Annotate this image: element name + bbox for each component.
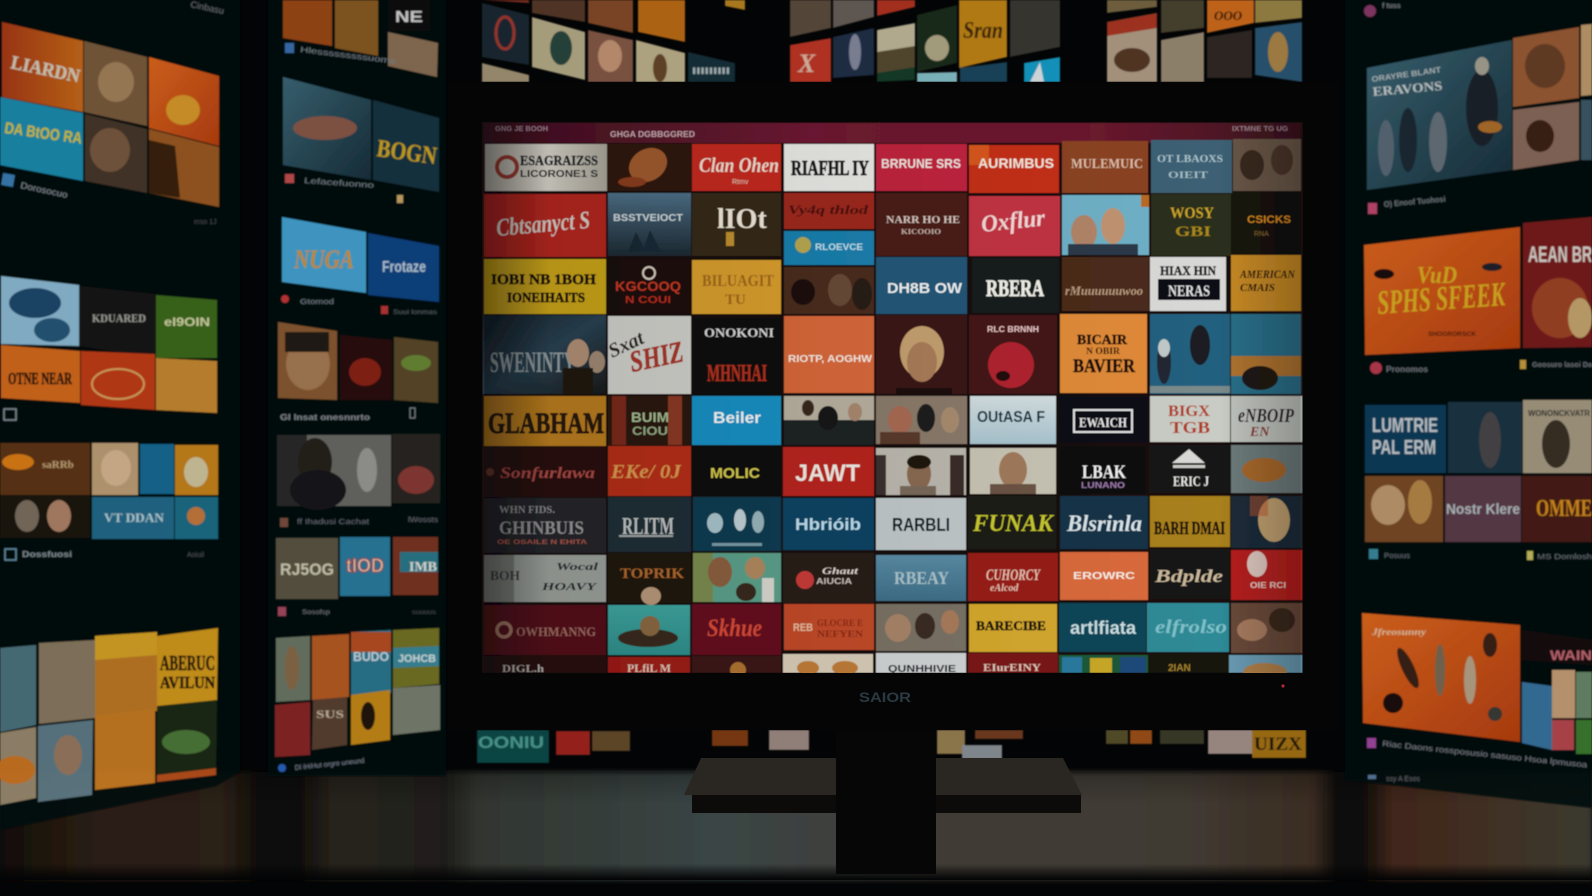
tile: pale caps <box>876 498 966 550</box>
screen top bar: GNG JE BOOH <box>495 126 548 133</box>
screen Q: mixed posters: PAL ERM <box>1372 437 1436 459</box>
tile: red cut 2 <box>968 653 1058 674</box>
reflection strip left: OONIU <box>478 733 544 752</box>
tile: pale caps: RARBLI <box>892 515 950 535</box>
tile: red script: Clan Ohen <box>699 153 779 177</box>
tile: rust <box>1062 141 1148 193</box>
tile: amber lettering: CMAIS <box>1240 282 1275 294</box>
tile: red planet: RLC BRNNH <box>987 325 1039 334</box>
tile: dark grey gothic <box>484 498 606 553</box>
tile: red handwriting: Vy4q thlod <box>788 202 869 217</box>
tile: blue emblem: RLOEVCE <box>815 242 863 252</box>
tile: blue faded <box>876 555 966 601</box>
tile: black stacked <box>1060 446 1146 494</box>
tile: dark red text: N COUI <box>625 295 671 306</box>
tile: pale with red <box>1150 396 1230 442</box>
tile: pale emblem title: ESAGRAIZSS <box>520 154 598 169</box>
screen A: top-left posters: mso 1J <box>194 219 217 226</box>
tile: dark teal bold: artlfiata <box>1070 618 1137 638</box>
screen F: teal posters: BOGN <box>375 135 438 170</box>
tile: white bold <box>784 144 874 191</box>
stand base front <box>692 795 1081 813</box>
screen R: bottom-right posters: Jfreosunny <box>1371 627 1427 637</box>
tile: pale dark script: EN <box>1249 425 1270 440</box>
row 9 tiles <box>484 603 1302 655</box>
tile: blue dancers <box>1150 314 1230 394</box>
tile: coral wide: EROWRC <box>1073 571 1135 582</box>
tile: blue emblem <box>784 231 874 265</box>
panel: second wall column <box>268 0 446 776</box>
tile: amber lettering: AMERICAN <box>1239 267 1296 281</box>
tile: red script: Rtmv <box>732 179 749 186</box>
row 6 tiles <box>484 445 1302 497</box>
tile: red script 2 <box>484 194 606 257</box>
tile: dark grey gothic: OE OSAILE N EHITA <box>497 539 587 546</box>
tile: colourful cut <box>1059 655 1148 673</box>
tile: red emblem: OIE RCI <box>1250 581 1286 590</box>
screen R: bottom-right posters: ssy A Esos <box>1386 776 1420 783</box>
screen A: top-left posters <box>0 0 225 226</box>
tile: smiling portrait <box>970 448 1056 494</box>
tile: black boxed title <box>1059 396 1148 443</box>
tile: red script 4: eAlcod <box>990 583 1019 594</box>
tile: black stacked: LUNANO <box>1081 481 1125 490</box>
screen R: bottom-right posters <box>1362 613 1592 783</box>
tile: light portrait <box>876 448 966 495</box>
tile: yellow bold <box>484 259 606 314</box>
tile: blue bold: DH8B OW <box>887 280 963 297</box>
tile: dark teal poster: SWENINTY <box>490 346 575 379</box>
screen K: bottom posters: JOHCB <box>398 653 436 665</box>
tile: dark maroon script <box>484 447 606 497</box>
tile: black orange: CSICKS <box>1247 214 1291 226</box>
tile: black two lines: ONOKONI <box>704 325 774 340</box>
tile: black yellow jagged: FUNAK <box>972 511 1055 537</box>
tile: white and black: NERAS <box>1168 283 1210 300</box>
screen N: top centre-right posters <box>1107 0 1302 82</box>
tile: slate: OT LBAOXS <box>1157 154 1223 165</box>
screen K: bottom posters <box>275 628 440 772</box>
tile: two portraits <box>1062 195 1149 255</box>
screen P: orange poster: VuD <box>1417 263 1457 289</box>
tile: red white <box>783 447 874 496</box>
screen I: photo posters: ff Ihadusi Cachat <box>297 519 369 526</box>
tile: orange poster: N OBIR <box>1086 346 1121 356</box>
screen E: top posters: Hlesssssssssuoms <box>300 45 396 66</box>
screen O: top-right posters: ORAYRE BLANT <box>1371 65 1442 84</box>
tile: yellow black: BARECIBE <box>976 618 1046 633</box>
screen J: three posters: suuuus <box>412 610 436 616</box>
screen Q: mixed posters: Posuus <box>1384 553 1411 560</box>
tile: pale caps cut <box>876 653 966 675</box>
reflection strip right <box>937 730 1306 759</box>
tile: brown scrawl <box>1062 257 1149 311</box>
monitor bezel <box>448 82 1337 730</box>
tile: pale blue title <box>970 396 1056 444</box>
tile: family photo <box>693 553 781 602</box>
screen G: blue posters: NUGA <box>293 245 354 274</box>
tile: red script 2: Cbtsanyct S <box>495 207 591 242</box>
tile: dark red text: KGCOOQ <box>615 278 681 294</box>
row 2 tiles <box>484 192 1301 265</box>
screen B: second-left posters: eI9OIN <box>164 315 210 329</box>
screen top bar: IXTMNE TG UG <box>1232 126 1289 133</box>
tile: dark maroon cut <box>484 656 606 675</box>
tile: yellow black <box>969 604 1057 652</box>
tile: yellow bold: IOBI NB 1BOH <box>491 272 596 288</box>
tile: bright blue <box>692 396 781 445</box>
panel: far-left wall screens <box>0 0 240 830</box>
tile: red amber: EKe/ 0J <box>610 461 682 483</box>
tile: red planet <box>969 315 1057 394</box>
tile: brown faces <box>784 267 874 314</box>
tile: red script <box>692 144 781 191</box>
tile: black yellow <box>692 446 781 496</box>
tile: pale dark script: eNBOIP <box>1238 405 1295 427</box>
tile: bright blue: Beiler <box>713 410 761 427</box>
screen K: bottom posters: BUDO <box>353 649 389 664</box>
tile: amber heavy: GLABHAM <box>488 407 604 440</box>
tile: four faces <box>876 396 967 444</box>
screen Q: mixed posters: Nostr Klere <box>1446 501 1520 518</box>
screen F: teal posters: Lefacefuonno <box>304 176 375 190</box>
tile: dark crowd <box>608 396 691 445</box>
tile: grey weathered: Wocal <box>556 562 598 573</box>
tile: dark topic <box>608 553 691 605</box>
tile: slate: OIEIT <box>1168 170 1208 180</box>
tile: blue faded: RBEAY <box>894 568 949 588</box>
screen top bar <box>484 123 1301 143</box>
stand base top <box>684 758 1082 795</box>
tile: yellow bold: IONEIHAITS <box>507 291 585 306</box>
tile: dark crowd: BUIM <box>631 409 669 425</box>
screen Q: mixed posters: WONONCKVATR <box>1528 409 1590 418</box>
tile: amber poster <box>1150 496 1230 547</box>
screen B: second-left posters: KDUARED <box>92 311 146 325</box>
bezel brand label: SAIOR <box>859 689 911 705</box>
screen P: orange poster: SHOGRORSCK <box>1428 332 1477 338</box>
tile: group photo <box>784 396 874 445</box>
tile: pale blue title: OUtASA F <box>977 409 1045 426</box>
tile: pale emblem title <box>485 144 607 191</box>
tile: dark maroon <box>876 193 967 256</box>
tile: black two lines: MHNHAI <box>707 361 767 387</box>
tile: brown scrawl: rMuuuuuuwoo <box>1065 283 1143 298</box>
tile: dark teal bold <box>1059 603 1146 652</box>
tile: brown bodies <box>1231 603 1302 653</box>
tile: red cut: PLfiL M <box>627 661 671 675</box>
tile: black tan script <box>1150 549 1230 599</box>
screen C: third-left posters: Dossfuosi <box>22 550 72 559</box>
panel: central screen <box>482 122 1303 681</box>
row 8 tiles <box>484 549 1302 605</box>
tile: grey weathered <box>484 555 606 602</box>
tile: blue-grey <box>608 193 691 256</box>
screen K: bottom posters: Dl iHiHut orgre uneund <box>294 758 365 772</box>
panel: low wall reflections behind stand <box>477 730 1306 763</box>
screen H: brown posters: Gl lnsat onesnnrto <box>280 413 370 422</box>
tile: black house <box>1149 445 1230 493</box>
tile: grey blob <box>1231 445 1302 493</box>
tile: olive yellow: WOSY <box>1170 205 1214 222</box>
tile: teal script <box>1147 603 1229 652</box>
tile: sepia <box>1233 139 1301 191</box>
tile: maroon ring <box>484 605 606 655</box>
screen C: third-left posters <box>0 443 218 560</box>
screen J: three posters: RJ5OG <box>280 560 334 579</box>
tile: dark blue castle <box>608 497 691 552</box>
screen E: top posters <box>283 0 438 77</box>
tile: coral text: GLOCRE E <box>817 618 863 628</box>
screen R: bottom-right posters: Riac Daons rossposusio sasuso Hsoa lpmusoa <box>1382 739 1588 770</box>
tile: dark grey gothic: WHN FIDS. <box>499 505 556 516</box>
screen K: bottom posters: SUS <box>316 707 344 721</box>
tile: red script 3: Oxflur <box>980 205 1047 238</box>
screen G: blue posters: Gtomod <box>300 299 334 306</box>
tile: white and black <box>1150 257 1226 311</box>
screen B: second-left posters: OTNE NEAR <box>8 369 72 388</box>
row 3 tiles <box>484 255 1301 314</box>
tile: dark cut 2: 2IAN <box>1168 663 1191 674</box>
tile: suit portrait <box>1231 496 1302 548</box>
screen H: brown posters <box>278 322 438 422</box>
tile: black jagged <box>972 258 1059 313</box>
screen N: top centre-right posters: OOO <box>1214 8 1243 23</box>
tile: dark maroon cut: DIGL.h <box>502 663 544 675</box>
tile: red cut 2: EIurEINY <box>983 662 1041 674</box>
screen P: orange poster: Goosuro lasoi Da <box>1532 362 1592 369</box>
tile: coral text: NEFYEN <box>817 629 864 639</box>
screen P: orange poster: Pronomos <box>1386 365 1429 374</box>
tile: teal script: elfrolso <box>1155 617 1227 638</box>
screen G: blue posters: Frotaze <box>382 259 426 276</box>
tile: pale script: Sxat <box>605 326 649 363</box>
tile: blue-grey: BSSTVEIOCT <box>613 213 683 224</box>
tile: blue lettering: Hbrióib <box>795 515 861 534</box>
row 7 tiles <box>484 496 1302 553</box>
screen J: three posters: IMB <box>409 560 437 575</box>
tile: blue lettering <box>783 498 874 550</box>
row 5 tiles <box>484 396 1302 446</box>
screen M: top centre posters: Sran <box>963 18 1003 44</box>
screen D: bottom-left posters <box>0 628 218 805</box>
tile: black house: ERIC J <box>1173 474 1209 490</box>
screen B: second-left posters <box>1 276 217 420</box>
tile: red cut <box>608 657 690 675</box>
tile: white bold: RIAFHL IY <box>791 156 869 180</box>
screen D: bottom-left posters: AVILUN <box>160 673 216 692</box>
panel: right wall screens <box>1345 0 1592 808</box>
tile: amber poster: BARH DMAI <box>1154 518 1225 538</box>
screen O: top-right posters: ERAVONS <box>1372 78 1443 99</box>
screen I: photo posters: lWossts <box>408 517 439 524</box>
tile: dark cut <box>692 656 781 678</box>
tile: funny faces <box>876 604 966 651</box>
tile: dark badge: Ghaut <box>822 566 859 576</box>
screen O: top-right posters: f tuss <box>1382 3 1401 10</box>
tile: black orange: RNA <box>1254 231 1269 238</box>
tile: pale with red: TGB <box>1170 418 1210 437</box>
screen C: third-left posters: Aoiuil <box>187 552 205 559</box>
screen G: blue posters: Suui lonmas <box>393 310 437 316</box>
screen Q: mixed posters <box>1365 400 1592 561</box>
tile: pale dark script <box>1231 396 1302 442</box>
tile: teal shapes <box>693 497 781 551</box>
tile: red script 4: CUHORCY <box>986 567 1041 584</box>
desk surface <box>0 772 1592 880</box>
tile: white and black: HIAX HIN <box>1160 263 1217 278</box>
screen D: bottom-left posters: ABERUC <box>160 651 215 675</box>
tile: navy script <box>1060 496 1148 549</box>
tile: maroon script <box>692 604 781 655</box>
tile: dark maroon: NARR HO HE <box>886 215 960 226</box>
tile: dark figure <box>608 141 691 191</box>
screen A: top-left posters: DA BtOO RA <box>3 120 83 148</box>
tile: teal with orange <box>1231 314 1301 394</box>
tile: black orange <box>1232 192 1301 256</box>
tile: black boxed title: EWAICH <box>1079 416 1127 431</box>
tile: red handwriting <box>784 193 874 229</box>
screen R: bottom-right posters: WAIN <box>1550 647 1592 663</box>
row 1 tiles <box>485 139 1301 193</box>
tile: grey weathered: HOAVY <box>540 582 597 593</box>
tile: olive yellow <box>1151 194 1231 256</box>
tile: maroon ring: OWHMANNG <box>516 624 596 639</box>
tile: red emblem <box>1231 550 1302 600</box>
screen vignette <box>484 123 1301 673</box>
tile: dark brown <box>692 193 781 256</box>
screen J: three posters: tIOD <box>346 556 384 577</box>
tile: red script 4 <box>968 553 1058 601</box>
stand neck <box>836 728 936 874</box>
tile: rust: MULEMUIC <box>1071 157 1143 172</box>
tile: slate <box>1151 140 1232 193</box>
tile: dark grey gothic: GHINBUIS <box>499 518 584 539</box>
tile: black yellow: MOLIC <box>710 465 760 482</box>
tile: crimson: BRRUNE SRS <box>881 156 961 171</box>
tile: dark maroon script: Sonfurlawa <box>500 465 595 482</box>
tile: red amber <box>608 446 691 496</box>
tile: maroon script: Skhue <box>707 615 762 642</box>
tile: dark red text <box>615 265 682 304</box>
tile: dark topic: TOPRIK <box>620 566 684 582</box>
screen Q: mixed posters: MS Domlosh <box>1537 554 1592 561</box>
screen G: blue posters <box>281 217 439 316</box>
screen A: top-left posters: Dorosocuo <box>20 180 69 200</box>
screen C: third-left posters: VT DDAN <box>104 510 165 525</box>
tile: red orange: AURIMBUS <box>978 155 1054 171</box>
tile: coral text: REB <box>793 622 813 634</box>
screen A: top-left posters: LIARDN <box>9 52 82 87</box>
row 10 partial tiles <box>484 653 1302 681</box>
tile: coral text <box>784 604 874 650</box>
screen O: top-right posters <box>1364 3 1592 214</box>
tile: orange poster: BICAIR <box>1077 333 1128 348</box>
screen C: third-left posters: saRRb <box>42 459 74 471</box>
tile: grey weathered: BOH <box>490 569 520 584</box>
tile: pale caps cut: QUNHHIVIE <box>888 664 956 675</box>
screen L: top centre-left posters: IIIIIIIII <box>692 66 730 76</box>
tile: orange poster <box>1060 314 1147 393</box>
tile: coral: RIOTP, AOGHW <box>788 354 873 365</box>
screen E: top posters: NE <box>395 9 423 26</box>
tile: blond portrait <box>876 315 967 394</box>
monitor stand <box>684 728 1082 874</box>
tile: black jagged: RBERA <box>986 276 1044 301</box>
tile: pale script <box>605 316 691 394</box>
tile: red script 3 <box>969 196 1060 256</box>
screen M: top centre posters: X <box>797 49 816 78</box>
tile: pale pizza cut <box>783 654 873 675</box>
screen J: three posters <box>276 537 438 616</box>
tile: teal creature <box>608 605 690 655</box>
tile: coral <box>784 316 874 393</box>
tile: dark teal poster <box>483 315 606 394</box>
tile: navy script: Blsrinla <box>1066 511 1142 536</box>
tile: orange poster: BAVIER <box>1073 356 1135 377</box>
tile: dark blue castle: RLITM <box>622 514 674 540</box>
power indicator <box>1281 684 1285 688</box>
tile: dark brown: lIOt <box>717 204 767 235</box>
tile: blue-orange cut <box>1229 655 1302 681</box>
tile: amber script: BILUAGIT <box>702 271 775 290</box>
screen F: teal posters <box>283 77 439 203</box>
tile: dark badge <box>783 553 874 603</box>
tile: dark cut 2 <box>1149 654 1229 674</box>
tile: red white: JAWT <box>795 460 860 487</box>
tile: dark badge: AIUCIA <box>816 577 852 586</box>
tile: black stacked: LBAK <box>1082 462 1126 483</box>
tile: crimson <box>876 144 967 191</box>
screen O: top-right posters: O) Enoof Tuohosi <box>1383 195 1446 209</box>
tile: pale with red: BIGX <box>1168 403 1210 420</box>
tile: red orange <box>969 145 1059 193</box>
screen P: orange poster: SPHS SFEEK <box>1376 276 1508 322</box>
tile: olive yellow: GBI <box>1175 224 1211 240</box>
tile: black tan script: Bdplde <box>1154 566 1223 586</box>
tile: dark crowd: CIOU <box>632 424 668 438</box>
reflection strip right: UIZX <box>1254 734 1302 755</box>
screen M: top centre posters <box>790 0 1060 82</box>
screen I: photo posters <box>277 434 440 527</box>
tile: coral wide <box>1060 552 1148 600</box>
screen L: top centre-left posters <box>482 0 745 82</box>
tile: black two lines <box>693 318 781 395</box>
tile: amber script <box>692 260 781 314</box>
screen Q: mixed posters: LUMTRIE <box>1372 415 1438 437</box>
screen J: three posters: Sosofsp <box>302 610 331 616</box>
tile: dark maroon: KICOOIO <box>901 228 942 236</box>
row 4 tiles <box>483 314 1301 395</box>
tile: black yellow jagged <box>968 496 1056 549</box>
screen top bar: GHGA DGBBGGRED <box>610 130 695 139</box>
tile: amber script: TU <box>725 292 746 308</box>
tile: amber heavy <box>484 396 606 446</box>
tile: pale script: SHIZ <box>627 335 686 379</box>
screen P: orange poster <box>1364 217 1592 374</box>
panel: top wall behind monitor <box>482 0 1302 82</box>
tile: pale emblem title: LICORONE1 S <box>520 169 598 180</box>
tile: blue bold <box>876 257 967 314</box>
reflection strip left <box>477 730 809 763</box>
tile: amber lettering <box>1231 255 1301 311</box>
